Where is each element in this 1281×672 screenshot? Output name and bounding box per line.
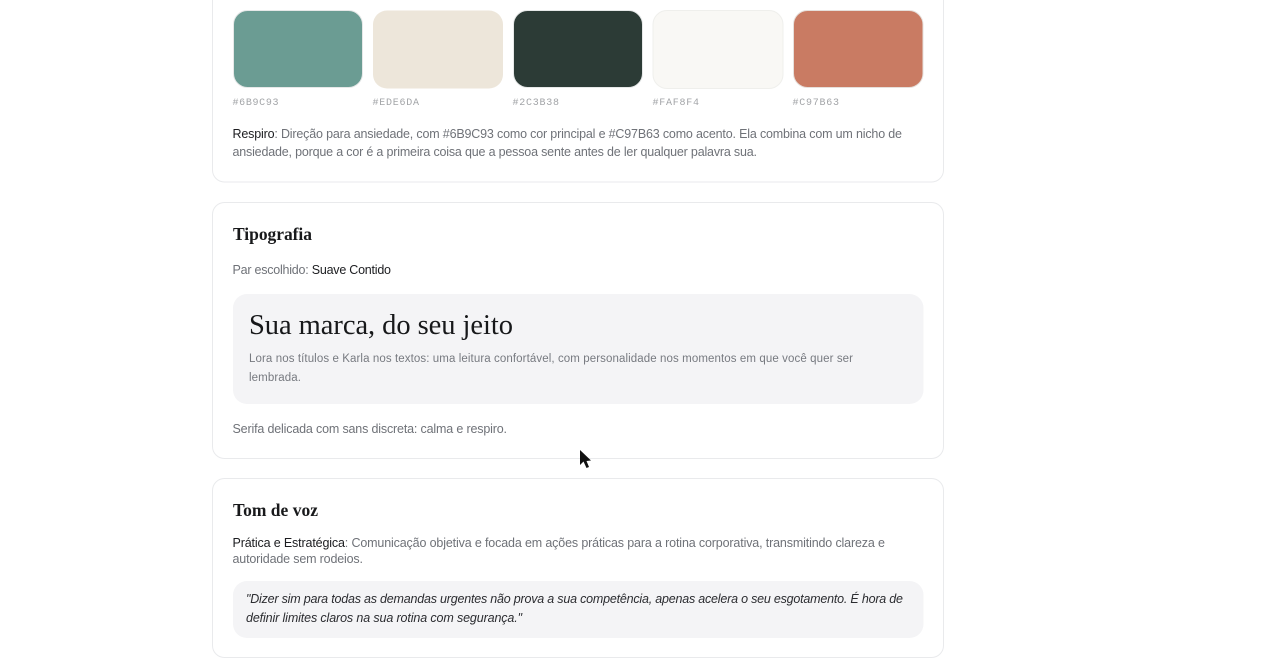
- swatch: 2C3B38: [512, 10, 642, 109]
- specimen text: lembrada.: [249, 372, 301, 384]
- text: descrição da paleta: Respiro: Direção para ansiedade, com #6B9C93 como cor principal e #C97B63 como acento. Ela combina com um nicho de: [232, 127, 902, 141]
- swatch: 2C3B38: #2C3B38: [512, 98, 559, 109]
- swatch: EDE6DA: [372, 10, 503, 109]
- swatch: 6B9C93: [232, 10, 362, 109]
- specimen text: [249, 353, 853, 384]
- heading: Tom de voz: Tom de voz: [233, 500, 318, 520]
- swatch: 6B9C93: #6B9C93: [232, 98, 278, 109]
- text: nota tipográfica: Serifa delicada com sans discreta: calma e respiro.: [232, 422, 507, 436]
- swatch: FAF8F4: #FAF8F4: [652, 98, 699, 109]
- panel: tipografia: [212, 202, 944, 458]
- panel: paleta de cores: [212, 0, 944, 182]
- swatch: C97B63: #C97B63: [792, 98, 839, 109]
- text: descrição da paleta: ansiedade, porque a cor é a primeira coisa que a pessoa sente antes de ler qualquer palavra sua.: [232, 145, 757, 159]
- specimen heading: Sua marca, do seu jeito: [249, 310, 513, 341]
- icon: mouse cursor: [580, 450, 591, 468]
- text: descrição da paleta: [232, 127, 902, 159]
- heading: Tipografia: Tipografia: [233, 224, 312, 244]
- swatch: C97B63: [792, 10, 923, 109]
- quote box: [233, 581, 924, 638]
- swatch: EDE6DA: #EDE6DA: [372, 98, 419, 109]
- text: par escolhido: Par escolhido: Suave Contido: [232, 263, 391, 277]
- panel: tom de voz: [212, 478, 944, 658]
- specimen text: Lora nos títulos e Karla nos textos: uma leitura confortável, com personalidade nos momentos em que você quer ser: [249, 353, 853, 365]
- type specimen box: [233, 294, 924, 404]
- swatch: FAF8F4: [652, 10, 783, 109]
- text: descrição do tom: Prática e Estratégica: Comunicação objetiva e focada em ações práticas para a rotina corporativa, transmitindo clareza e: [232, 536, 885, 550]
- quote box: definir limites claros na sua rotina com segurança.": [246, 611, 523, 625]
- text: descrição do tom: [232, 536, 885, 566]
- text: descrição do tom: autoridade sem rodeios.: [232, 552, 363, 566]
- quote box: "Dizer sim para todas as demandas urgentes não prova a sua competência, apenas acelera o seu esgotamento. É hora de: [246, 591, 903, 606]
